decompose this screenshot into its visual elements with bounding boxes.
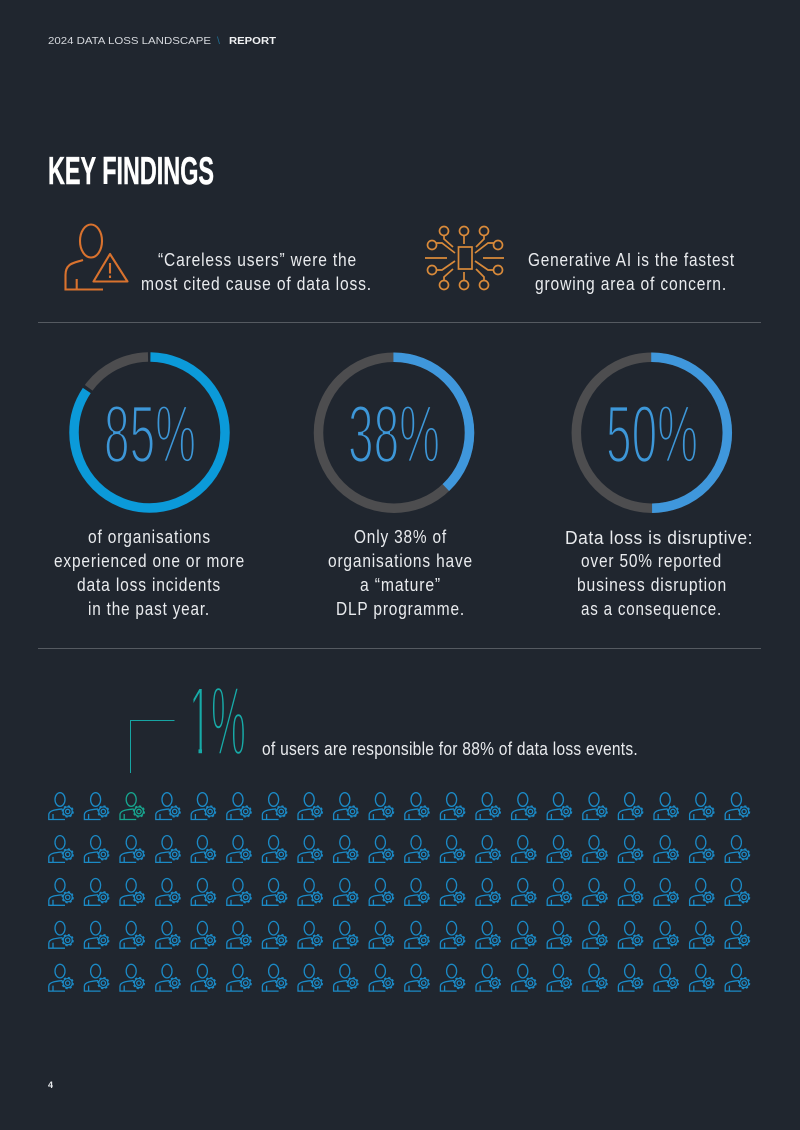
number: 38%: 38%	[348, 389, 440, 480]
icon: AI chip circuit	[425, 226, 504, 290]
text: 38% description: a “mature”	[360, 574, 441, 595]
callout: 1% of users	[130, 666, 638, 776]
chart: 38% ring	[318, 357, 470, 508]
connector line	[130, 720, 174, 773]
icon: user with warning triangle	[66, 224, 128, 290]
page number: 4	[48, 1080, 53, 1090]
text: 50% description: as a consequence.	[581, 598, 722, 619]
text: 38% description: Only 38% of	[354, 526, 447, 547]
title: KEY FINDINGS	[48, 150, 214, 193]
chart: 50% ring	[576, 357, 727, 508]
text: 50% description: business disruption	[577, 574, 727, 595]
text: 50% description: Data loss is disruptive:	[565, 527, 753, 548]
text: 85% description: of organisations	[88, 526, 211, 547]
panel: 50% stat	[565, 357, 753, 619]
highlighted user: the 1%	[120, 793, 144, 820]
text: careless users	[141, 249, 372, 294]
pictogram: 100 users	[49, 793, 750, 991]
page header: 2024 DATA LOSS LANDSCAPE	[48, 35, 211, 47]
number: 50%: 50%	[606, 389, 698, 480]
number: 1%	[188, 666, 246, 776]
text: 38% description: DLP programme.	[336, 598, 465, 619]
text: careless users: most cited cause of data loss.	[141, 273, 372, 294]
text: 85% description	[54, 526, 245, 619]
page header	[48, 35, 277, 47]
callout: 1% of users: 1%	[189, 666, 246, 776]
panel: 38% stat	[318, 357, 473, 619]
text: 50% description: over 50% reported	[581, 550, 722, 571]
chart: 85% ring	[74, 357, 225, 508]
page header: \	[217, 35, 220, 47]
text: 38% description: organisations have	[328, 550, 473, 571]
text: 38% description	[328, 526, 473, 619]
finding: careless users	[66, 224, 372, 294]
text: careless users: “Careless users” were the	[158, 249, 357, 270]
number: 85%: 85%	[104, 389, 196, 480]
text: generative AI	[528, 249, 735, 294]
text: 85% description: in the past year.	[88, 598, 210, 619]
text: generative AI: growing area of concern.	[535, 273, 727, 294]
page header: REPORT	[229, 35, 277, 47]
text: generative AI: Generative AI is the fastest	[528, 249, 735, 270]
text: 50% description	[565, 527, 753, 619]
finding: generative AI	[425, 226, 735, 294]
text: 85% description: data loss incidents	[77, 574, 221, 595]
panel: 85% stat	[54, 357, 245, 619]
text: 85% description: experienced one or more	[54, 550, 245, 571]
text: 1% description: of users are responsible for 88% of data loss events.	[262, 739, 638, 759]
